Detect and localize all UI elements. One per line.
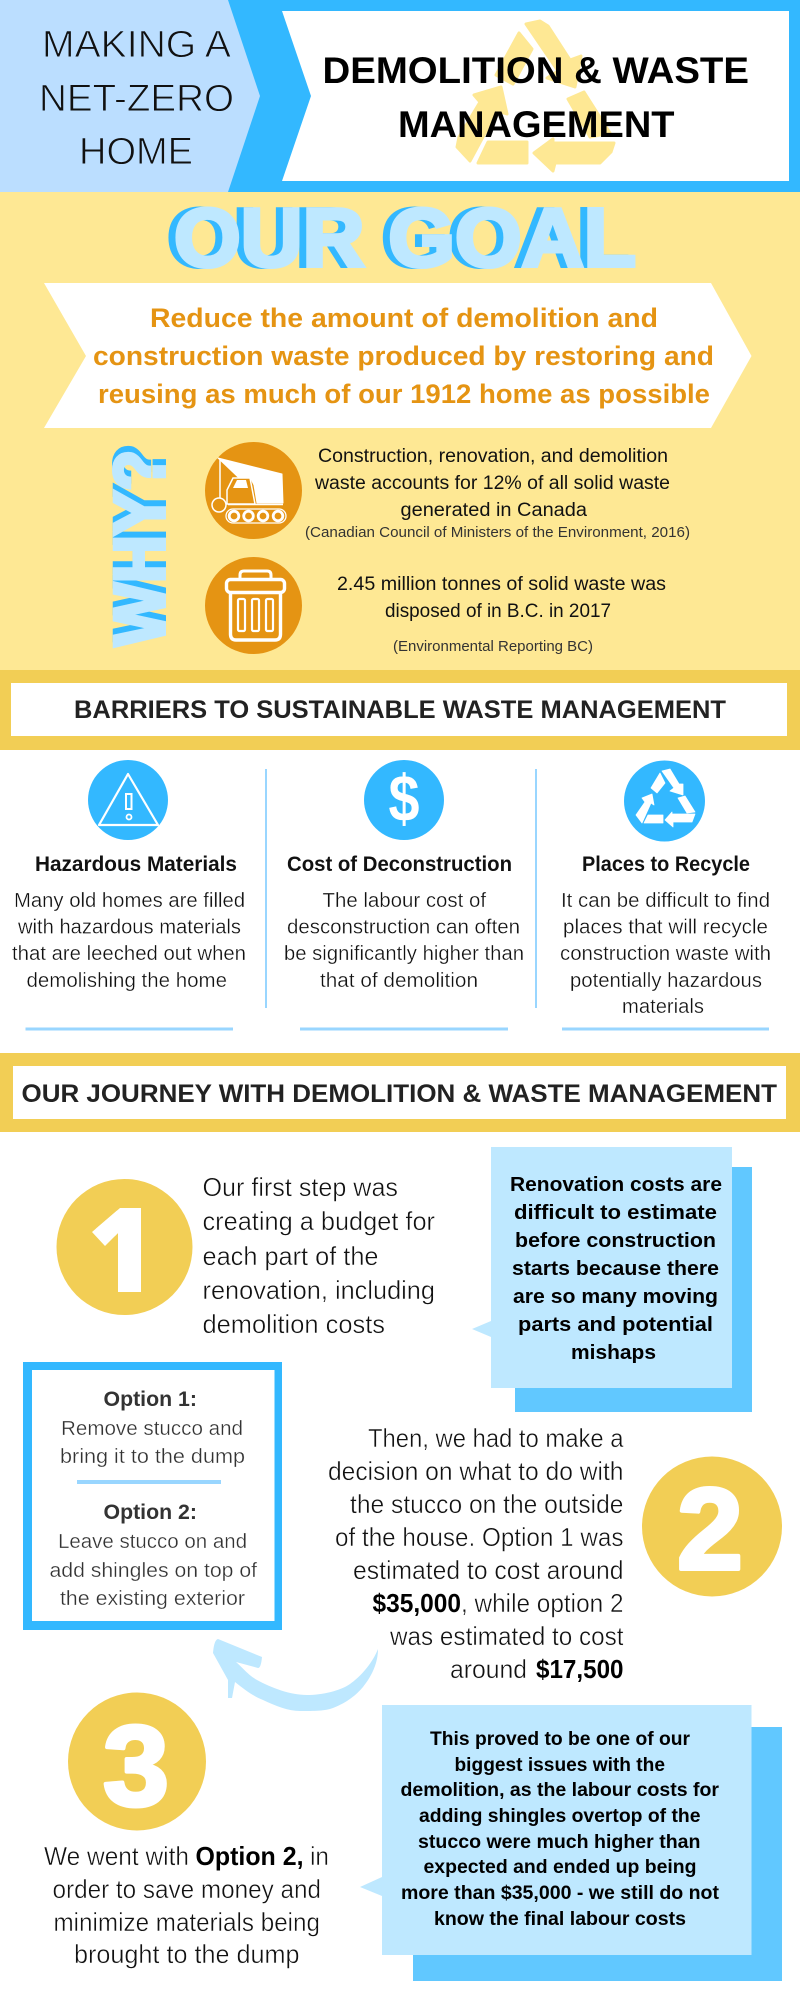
callout: labour costs: This proved to be one of our [430,1729,690,1750]
heading: why: WHY? [101,450,180,646]
icon: demolition machine [205,442,302,539]
callout: renovation costs [472,1147,752,1412]
panel: hazardous materials: Hazardous Materials [35,853,237,876]
callout: labour costs: know the final labour costs [434,1909,686,1930]
heading: barriers band: BARRIERS TO SUSTAINABLE WASTE MANAGEMENT [74,696,726,724]
panel: cost of deconstruction [284,760,524,1030]
text: step 2: , while option 2 [461,1588,624,1618]
panel: places to recycle: potentially hazardous [570,970,762,992]
icon: dollar: $ [388,761,420,835]
panel: options box: add shingles on top of [50,1560,257,1582]
header banner [0,0,800,192]
text: step 1: renovation, including [202,1275,435,1305]
text: step 3: We went with [44,1841,189,1871]
panel: cost of deconstruction: that of demolition [320,970,478,992]
heading: why: WHY? [101,444,180,640]
heading: journey band [0,1053,800,1132]
heading: journey band: OUR JOURNEY WITH DEMOLITION & WASTE MANAGEMENT [22,1080,777,1108]
text: step 1 [202,1172,435,1339]
callout: labour costs [360,1705,782,1981]
panel: cost of deconstruction: be significantly higher than [284,943,524,965]
arrow: to options box [213,1639,378,1711]
text: step 1: each part of the [202,1241,378,1271]
text: step 1: creating a budget for [202,1206,435,1236]
text: step 2 [328,1423,624,1684]
callout: renovation costs: before construction [515,1229,716,1252]
panel: places to recycle: places that will recycle [563,916,768,938]
step 2 number: 2 [677,1464,743,1594]
icon: trash bin [205,557,302,654]
goal arrow banner [44,283,752,428]
text: step 1: demolition costs [202,1309,385,1339]
callout: renovation costs: parts and potential [518,1313,713,1336]
panel: places to recycle: construction waste with [560,943,771,965]
panel: options box: Option 2: [104,1501,197,1524]
panel: places to recycle [560,760,771,1030]
callout: labour costs: biggest issues with the [454,1755,665,1776]
text: step 3 [44,1841,329,1969]
panel: series label: MAKING A [42,24,232,66]
icon: dollar [364,760,444,840]
panel: hazardous materials: Many old homes are filled [14,890,245,912]
callout: renovation costs: are so many moving [513,1285,718,1308]
panel: header title [282,11,789,181]
icon: warning [88,760,168,840]
text: step 3: Option 2, [196,1841,304,1871]
panel: cost of deconstruction: Cost of Deconstruction [287,853,512,876]
text: step 1: Our first step was [202,1172,398,1202]
panel: hazardous materials [12,760,246,1030]
icon: recycling watermark [457,21,614,171]
panel: cost of deconstruction: desconstruction can often [287,916,520,938]
panel: hazardous materials: with hazardous materials [17,916,241,938]
heading: our goal: OUR GOAL [167,191,629,284]
text: construction waste fact: (Canadian Council of Ministers of the Environment, 2016) [305,524,690,541]
callout: labour costs: expected and ended up being [424,1857,696,1878]
text: step 2: $17,500 [536,1654,624,1684]
step 1 number [56,1179,192,1315]
callout: labour costs: adding shingles overtop of the [419,1806,701,1827]
panel: series label: HOME [79,131,193,173]
text: step 2: $35,000 [372,1588,461,1618]
text: step 2: of the house. Option 1 was [335,1522,624,1552]
icon: recycle [624,760,705,842]
panel: cost of deconstruction: The labour cost of [322,890,486,912]
callout: renovation costs: starts because there [512,1257,719,1280]
text: step 2: was estimated to cost [389,1621,624,1651]
text: solid waste fact [337,574,666,655]
panel: hazardous materials: that are leeched out when [12,943,246,965]
text: step 3: minimize materials being [54,1907,320,1937]
callout: renovation costs: mishaps [571,1341,656,1364]
text: step 2: estimated to cost around [353,1555,624,1585]
text: step 2: Then, we had to make a [368,1423,624,1453]
text: construction waste fact: waste accounts for 12% of all solid waste [314,473,670,494]
divider [265,769,267,1008]
panel: series label [0,0,260,192]
panel: our goal section [0,191,800,670]
divider [535,769,537,1008]
panel: options box [23,1362,282,1630]
panel: options box: Option 1: [104,1388,197,1411]
step 3 number [68,1692,206,1830]
text: construction waste fact [305,446,690,541]
callout: renovation costs: difficult to estimate [514,1201,717,1224]
step 2 number [642,1456,782,1596]
callout: labour costs: stucco were much higher than [418,1832,700,1853]
callout: labour costs: demolition, as the labour costs for [400,1780,720,1801]
text: step 3: in [310,1841,329,1871]
panel: series label: NET-ZERO [39,78,234,120]
heading: our goal: OUR GOAL [174,191,636,284]
text: step 2: around [450,1654,527,1684]
goal arrow banner: construction waste produced by restoring and [93,341,714,371]
panel: places to recycle: Places to Recycle [582,853,750,876]
text: step 2: decision on what to do with [328,1456,624,1486]
panel: header title: MANAGEMENT [398,103,675,145]
text: step 2: the stucco on the outside [350,1489,624,1519]
goal arrow banner: Reduce the amount of demolition and [150,303,658,333]
callout: renovation costs: Renovation costs are [510,1173,722,1196]
panel: places to recycle: materials [622,996,704,1018]
text: solid waste fact: disposed of in B.C. in 2017 [385,601,611,622]
heading: barriers band [0,670,800,750]
panel: hazardous materials: demolishing the home [26,970,227,992]
text: solid waste fact: 2.45 million tonnes of solid waste was [337,574,666,595]
text: construction waste fact: Construction, renovation, and demolition [318,446,668,467]
panel: places to recycle: It can be difficult to find [561,890,770,912]
step 1 number: 1 [88,1187,152,1315]
goal arrow banner: reusing as much of our 1912 home as possible [98,379,710,409]
step 3 number: 3 [103,1703,169,1830]
panel: options box: bring it to the dump [60,1446,245,1468]
panel: options box: Leave stucco on and [58,1531,247,1553]
panel: options box: Remove stucco and [61,1418,243,1440]
text: step 3: order to save money and [52,1874,321,1904]
text: solid waste fact: (Environmental Reporting BC) [393,638,593,655]
panel: header title: DEMOLITION & WASTE [322,49,749,91]
callout: labour costs: more than $35,000 - we still do not [401,1883,720,1904]
text: construction waste fact: generated in Canada [400,500,587,521]
text: step 3: brought to the dump [74,1939,300,1969]
panel: options box: the existing exterior [60,1588,245,1610]
